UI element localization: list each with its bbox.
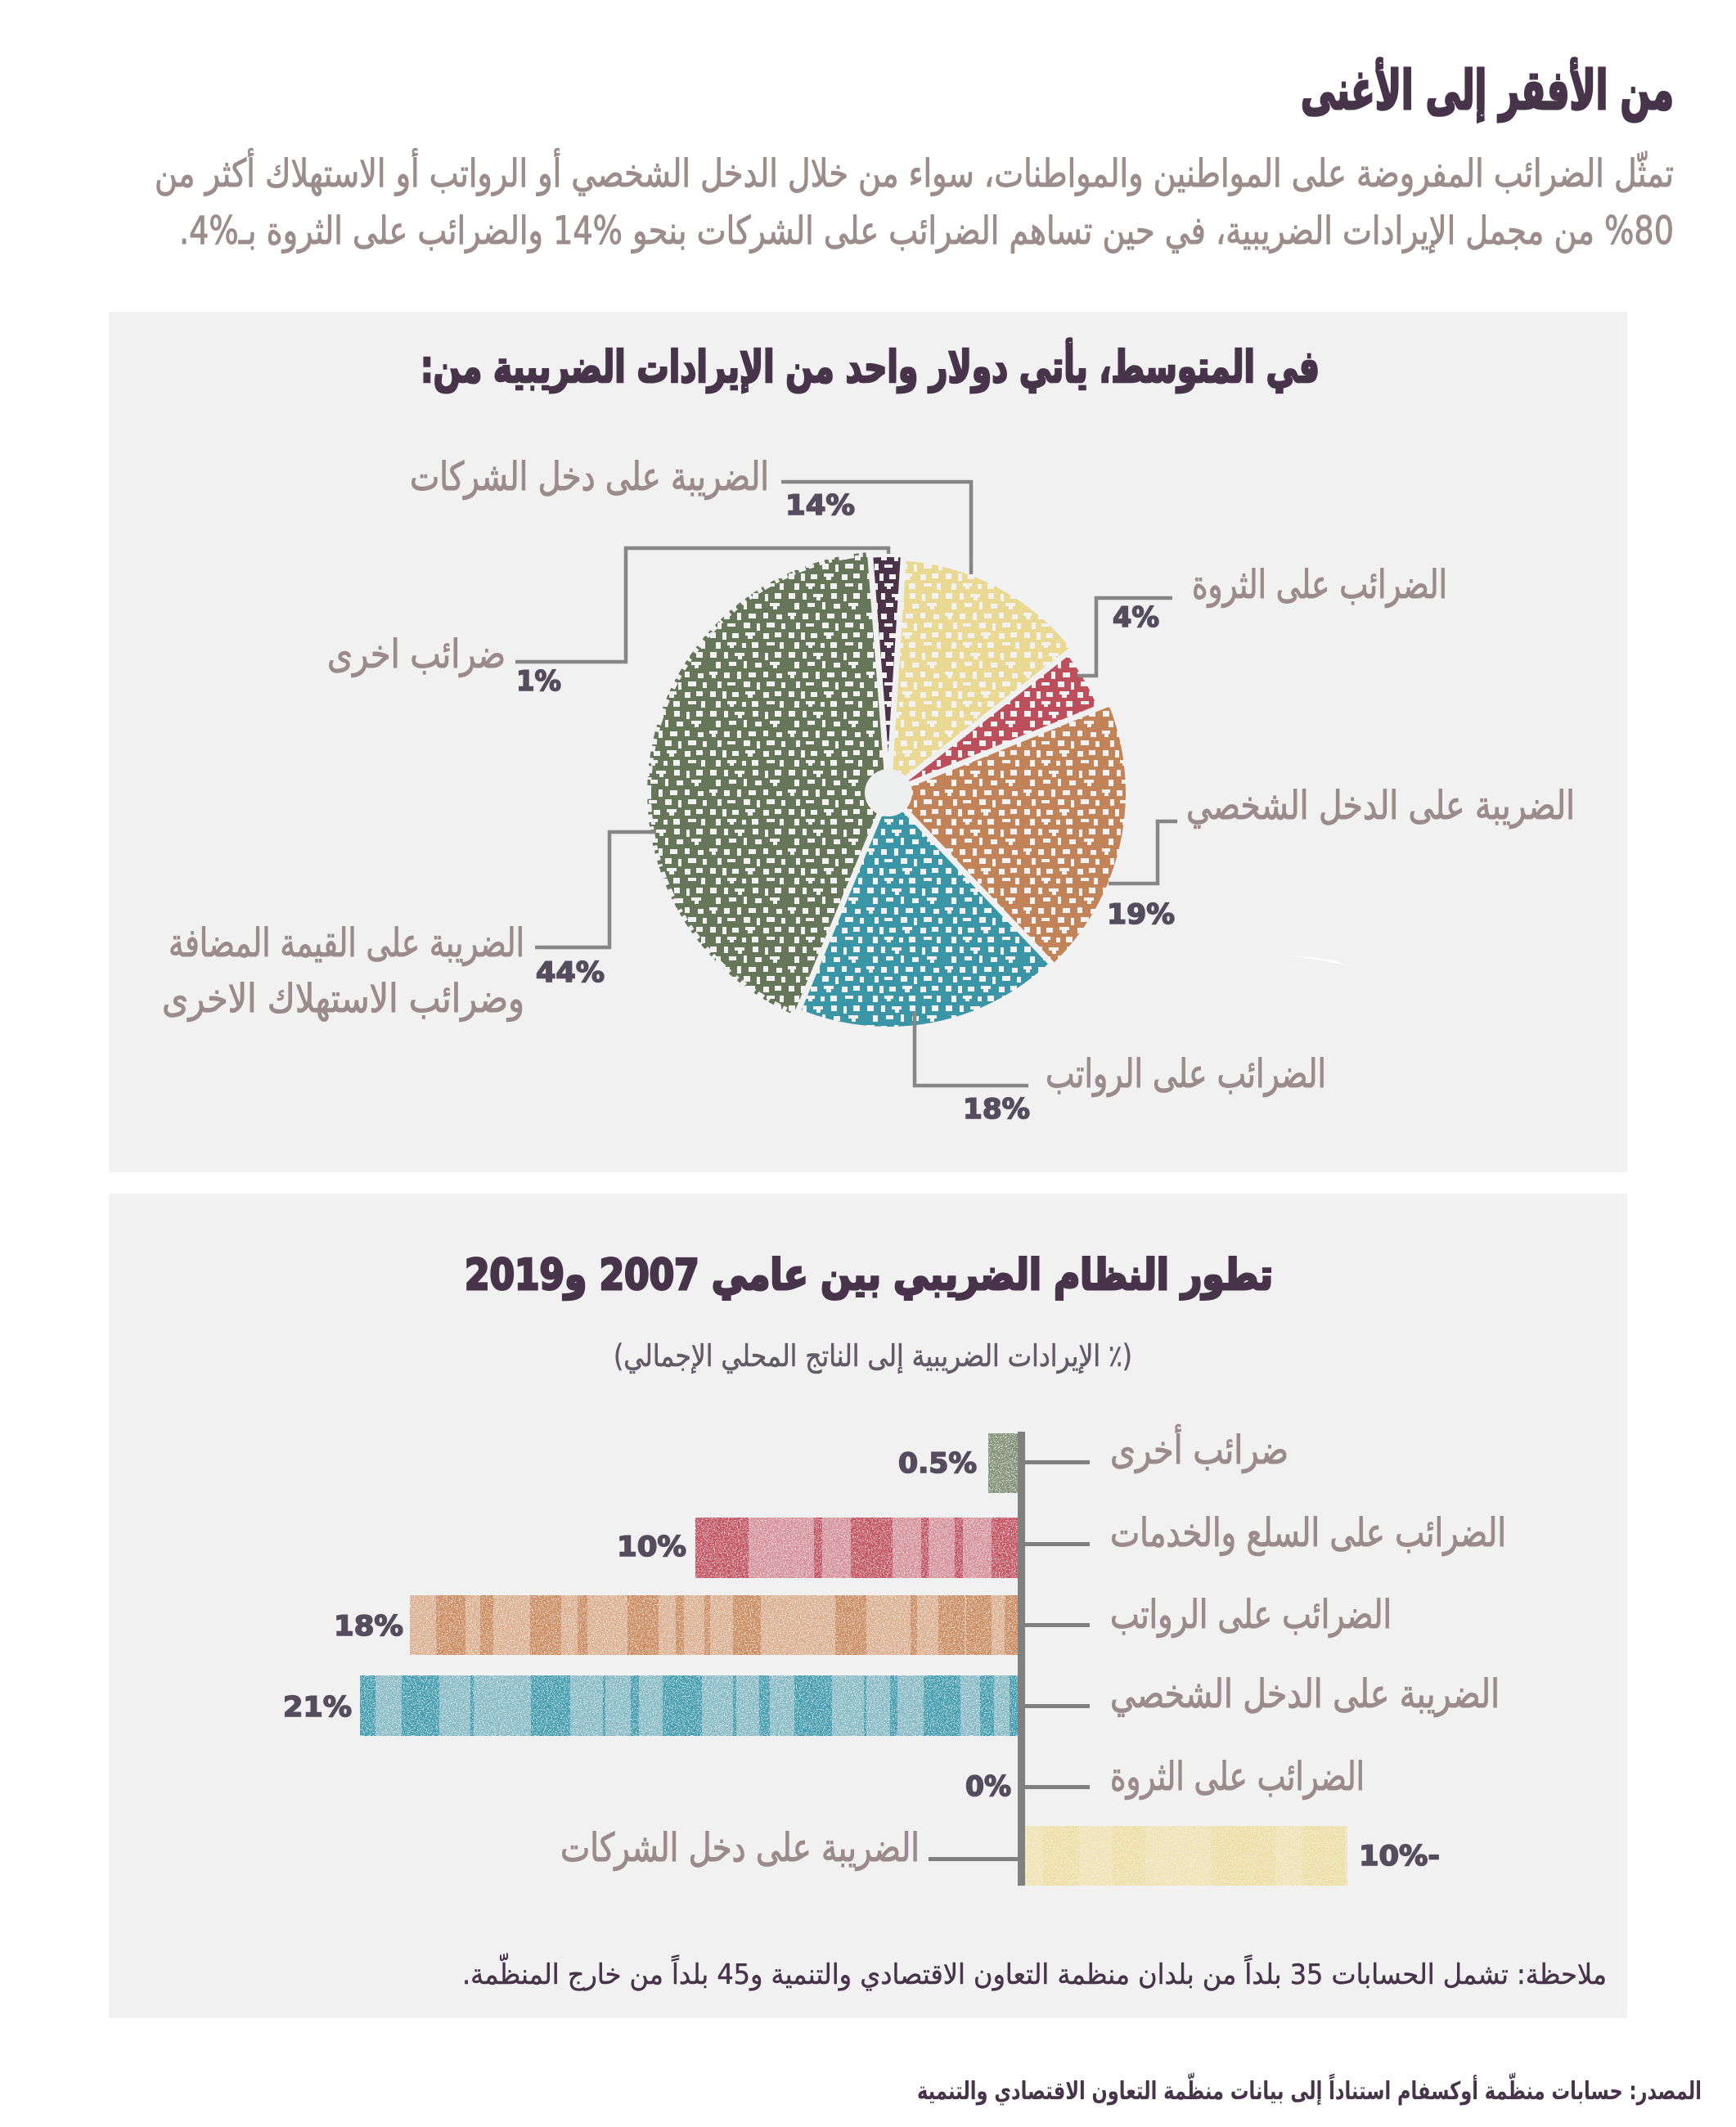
label: VAT and consumption taxes: وضرائب الاستهلاك الاخرى xyxy=(162,976,524,1022)
wedge: personal income tax xyxy=(888,704,1126,965)
leader line: other taxes xyxy=(515,548,888,662)
panel: revenue sources pie xyxy=(109,312,1627,1172)
wedge: corporate income tax xyxy=(888,561,1072,793)
axis and ticks xyxy=(929,1432,1090,1886)
bar value labels: 0% xyxy=(965,1770,1011,1803)
bar category labels xyxy=(560,1424,1506,1871)
label: corporate tax: الضريبة على دخل الشركات xyxy=(410,454,769,500)
leader line: wealth tax xyxy=(1077,598,1172,676)
label: corporate tax: 14% xyxy=(785,489,855,522)
bar value labels xyxy=(283,1447,1440,1873)
label: wealth tax xyxy=(1113,562,1447,634)
centre hole xyxy=(865,769,912,816)
wedge: VAT and consumption taxes xyxy=(647,552,888,1016)
label: corporate tax xyxy=(410,454,855,522)
bar value labels: 0.5% xyxy=(898,1447,977,1480)
bar category labels: الضريبة على الدخل الشخصي xyxy=(1110,1671,1500,1717)
label: personal income tax: الضريبة على الدخل الشخصي xyxy=(1186,783,1575,829)
bar category labels: الضرائب على الثروة xyxy=(1110,1754,1365,1800)
bar category labels: الضرائب على السلع والخدمات xyxy=(1110,1510,1506,1556)
label: VAT and consumption taxes: الضريبة على القيمة المضافة xyxy=(169,920,524,966)
label: other taxes: ضرائب اخرى xyxy=(327,632,506,677)
note: ملاحظة: تشمل الحسابات 35 بلداً من بلدان منظمة التعاون الاقتصادي والتنمية و45 بلداً من خارج المنظّمة. xyxy=(462,1954,1607,1991)
bar: payroll taxes xyxy=(410,1595,1018,1655)
bar value labels: 18% xyxy=(334,1610,403,1643)
label: VAT and consumption taxes xyxy=(162,920,605,1022)
label: payroll tax: 18% xyxy=(963,1093,1030,1126)
label: VAT and consumption taxes: 44% xyxy=(536,956,605,989)
leader line: payroll tax xyxy=(915,1012,1028,1086)
leader line: corporate tax xyxy=(781,482,971,574)
bar: personal income taxes xyxy=(360,1675,1018,1736)
wedge: other taxes xyxy=(870,557,904,793)
panel heading: في المتوسط، يأتي دولار واحد من الإيرادات الضريبية من: xyxy=(421,338,1320,393)
leader line: personal income tax xyxy=(1109,821,1177,884)
bar category labels: ضرائب أخرى xyxy=(1110,1424,1289,1473)
bar: corporate income tax xyxy=(1025,1826,1347,1886)
bar value labels: 21% xyxy=(283,1691,352,1724)
bar: other taxes xyxy=(988,1433,1018,1493)
bar: goods and services taxes xyxy=(695,1518,1018,1578)
panel heading: تطور النظام الضريبي بين عامي 2007 و2019 xyxy=(465,1251,1273,1300)
bar value labels: 10% xyxy=(617,1531,686,1563)
bar value labels: 10%- xyxy=(1359,1840,1440,1873)
pie chart xyxy=(639,540,1138,1042)
intro text block xyxy=(155,148,1674,254)
wedge: wealth tax xyxy=(888,654,1098,793)
label: payroll tax: الضرائب على الرواتب xyxy=(1046,1051,1326,1097)
label: personal income tax: 19% xyxy=(1107,898,1175,931)
label: other taxes xyxy=(327,632,561,698)
jagged outer edge xyxy=(646,551,1131,1035)
label: personal income tax xyxy=(1107,783,1575,931)
label: wealth tax: الضرائب على الثروة xyxy=(1192,562,1447,608)
label: payroll tax xyxy=(963,1051,1326,1126)
panel: tax evolution bar chart xyxy=(109,1194,1627,2018)
panel subheading: (٪ الإيرادات الضريبية إلى الناتج المحلي الإجمالي) xyxy=(614,1338,1132,1374)
woven texture overlay xyxy=(639,543,1138,1042)
label: wealth tax: 4% xyxy=(1113,601,1159,634)
label: other taxes: 1% xyxy=(516,665,561,698)
bar category labels: الضريبة على دخل الشركات xyxy=(560,1825,920,1871)
wedge gaps xyxy=(796,540,1113,1016)
wedge: payroll tax xyxy=(799,793,1050,1027)
bar category labels: الضرائب على الرواتب xyxy=(1110,1592,1392,1638)
leader line: VAT xyxy=(535,832,656,947)
small white brush mark xyxy=(1288,956,1346,965)
